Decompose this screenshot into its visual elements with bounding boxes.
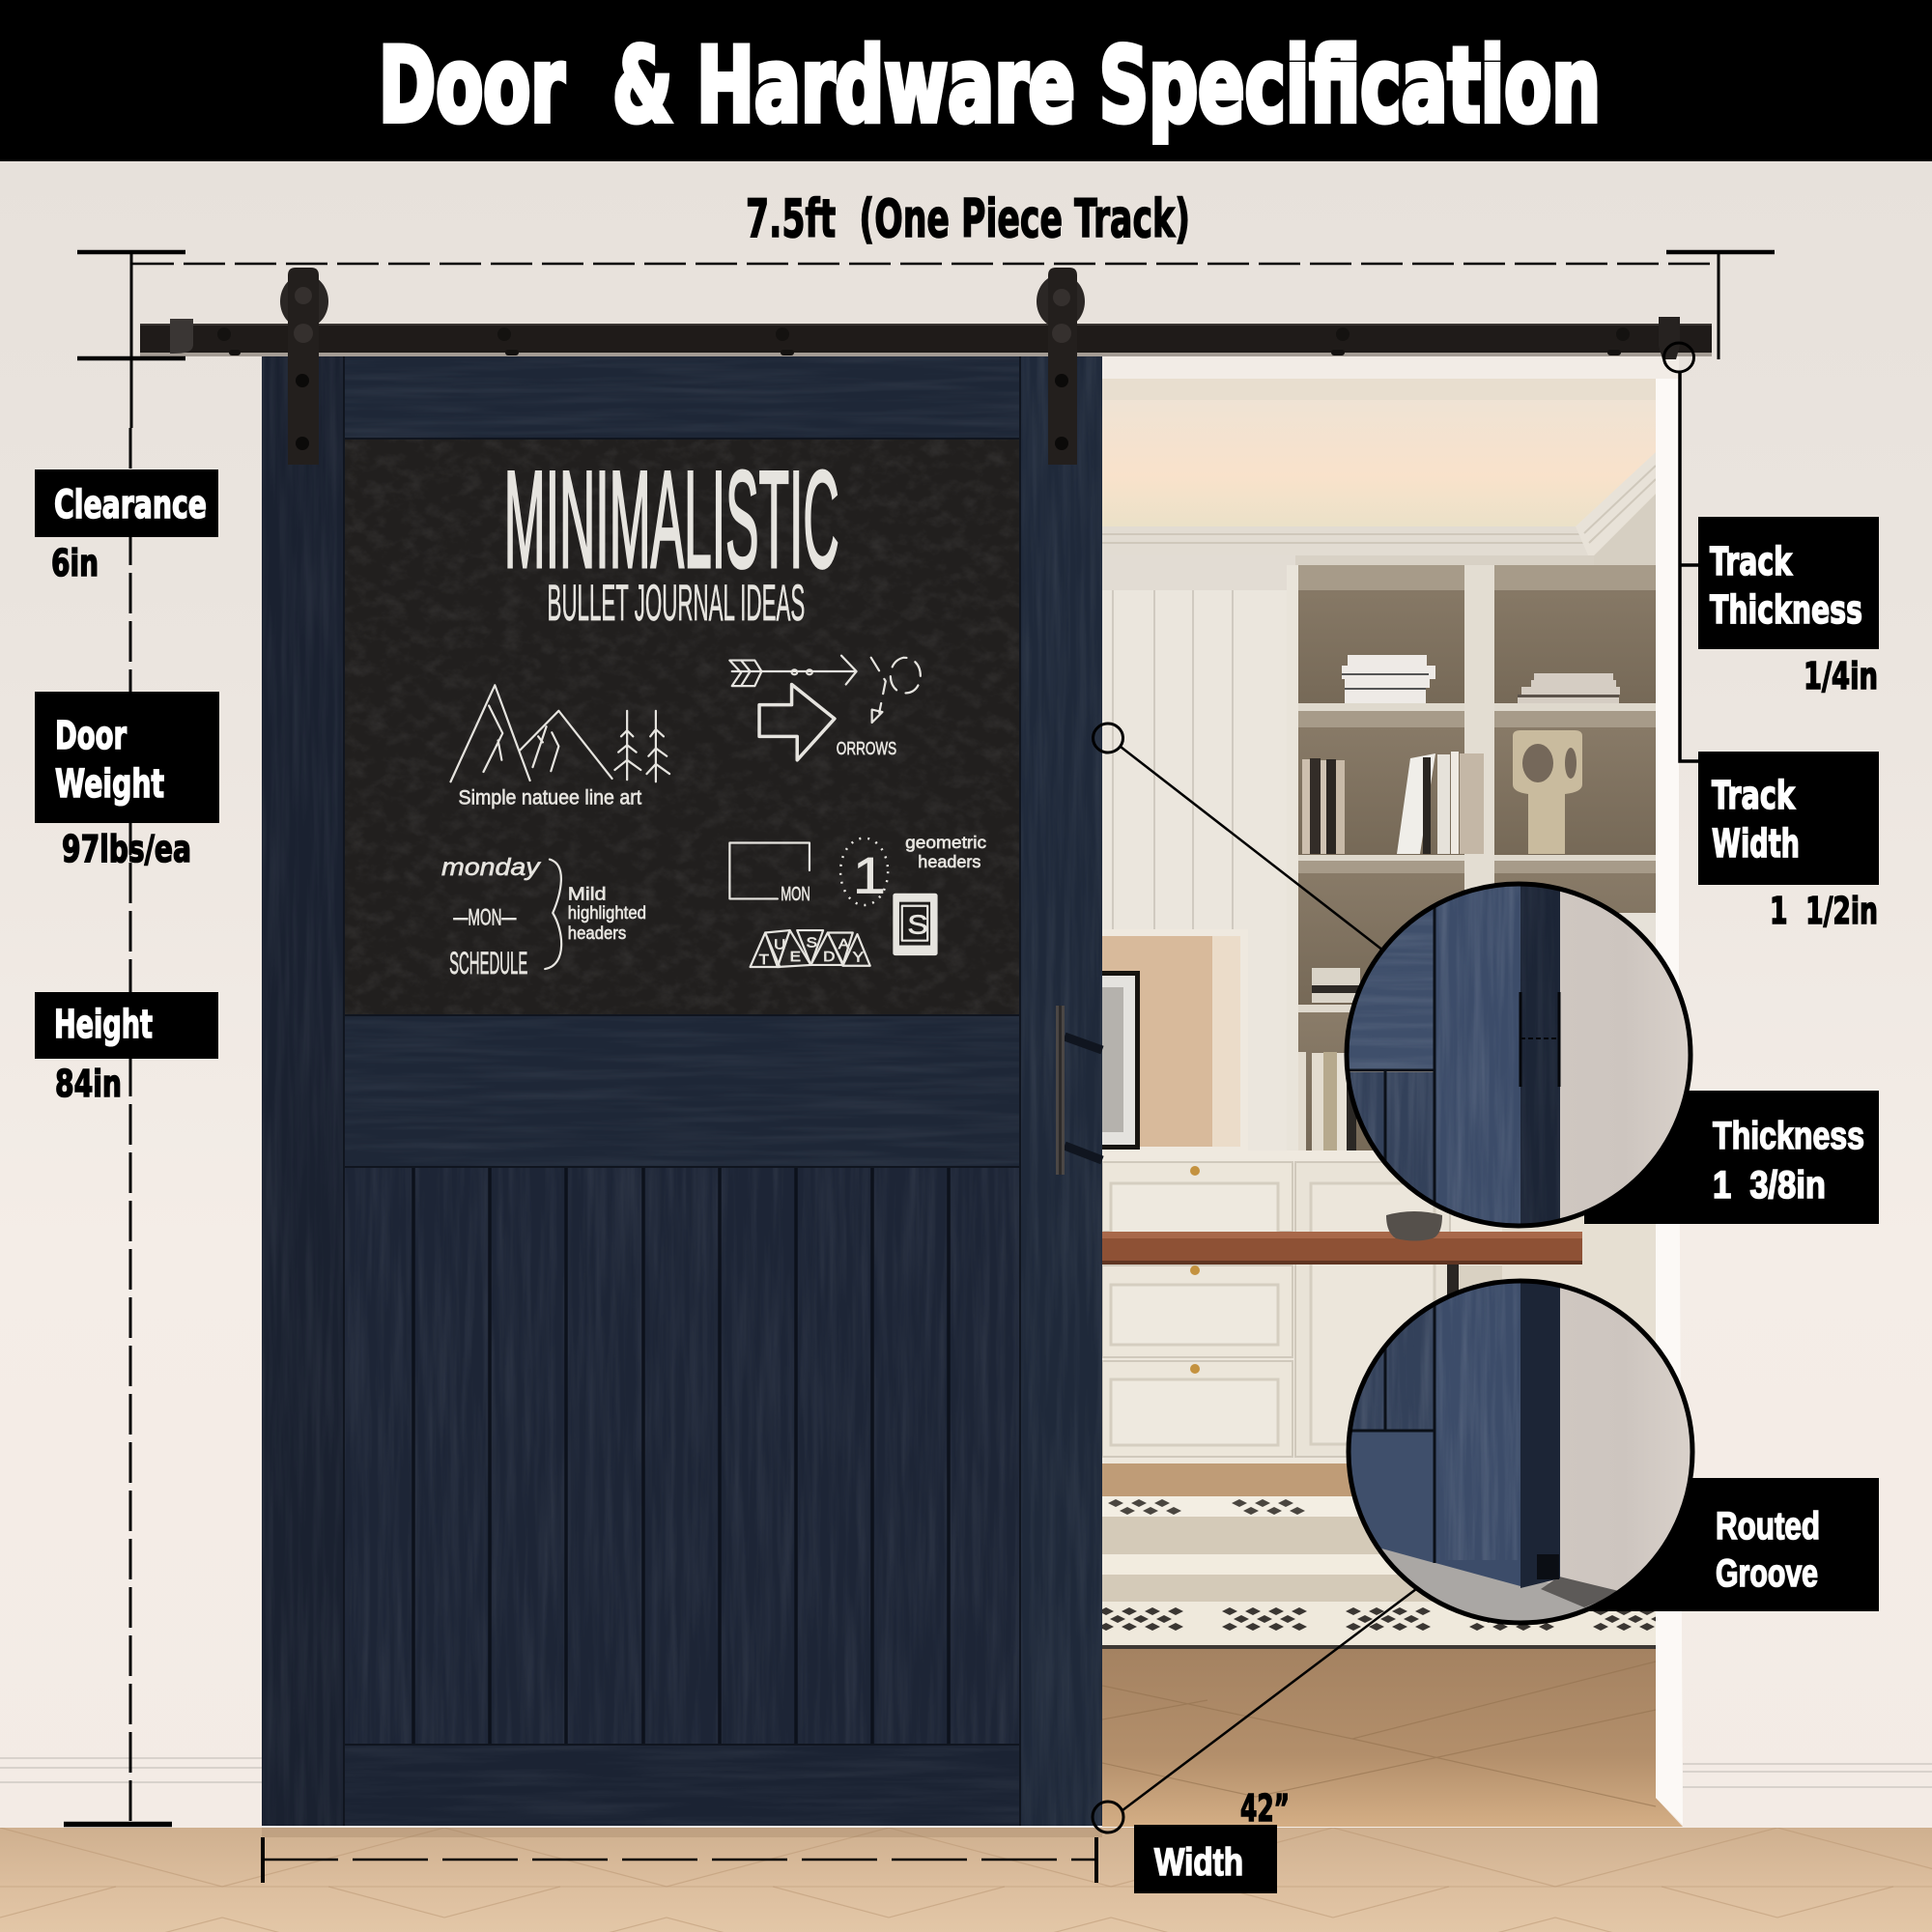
value: width: 42” [1240,1787,1290,1830]
callout: thickness: 1 3/8in [1713,1164,1826,1207]
desk [1102,1211,1582,1264]
value: clearance: 6in [51,542,99,584]
bookshelf [1287,565,1656,1159]
track bolts [217,327,1630,355]
arrows drawing [729,656,921,760]
brace [545,860,561,969]
floor [0,1828,1932,1932]
monday text: monday [441,853,542,880]
leader line groove [1093,1589,1416,1833]
callout: thickness [1584,1091,1879,1224]
callout: routed groove: Routed [1716,1505,1820,1548]
S badge [893,894,938,955]
top rail [345,356,1019,438]
callout: clearance [35,469,218,537]
callout: height [35,992,218,1059]
track length dimension line [77,252,1775,359]
barn door [262,356,1102,1826]
callout: width: Width [1154,1841,1243,1884]
barn door: MINIMALISTIC [504,441,839,596]
chalk caption geometric: headers [918,852,980,871]
right roller hanger [1037,268,1085,465]
callout: track thickness [1698,517,1879,649]
white panelling [1102,555,1295,1159]
callout: track width: Width [1712,822,1800,867]
callout: track thickness: Track [1710,540,1793,584]
room behind door [1102,353,1683,1827]
value: height: 84in [55,1063,122,1105]
lock rail [345,1016,1019,1166]
numbered circle [840,838,888,905]
room floor and rug [1102,1463,1683,1827]
magnifier: door thickness detail [1343,879,1695,1232]
callout: width [1134,1825,1277,1893]
soffit and ceiling [1102,353,1679,526]
framed art [1102,929,1248,1151]
tuesday pennants: U [774,938,785,952]
callout: door weight: Door [55,714,127,758]
callout: routed groove: Groove [1716,1552,1818,1595]
track length label: 7.5ft (One Piece Track) [746,188,1190,249]
mon divider text: —MON— [453,905,517,930]
door width dimension line [263,1837,1096,1883]
chalk caption mild: headers [568,923,626,944]
chalk caption arrows: ORROWS [837,739,896,759]
value: door weight: 97lbs/ea [62,828,191,870]
door slab [262,356,1102,1826]
chalk caption nature: Simple natuee line art [459,785,642,809]
chalkboard panel [345,440,1019,1014]
crown moulding [1102,452,1656,570]
tuesday pennants: T [759,952,769,968]
callout: routed groove [1584,1478,1879,1611]
rectangular header [729,842,810,905]
tuesday pennants: S [807,936,817,951]
track thickness connector [1663,343,1698,761]
callout: track width [1698,752,1879,885]
callout: door weight [35,692,219,823]
tuesday pennants: A [838,937,849,952]
chalk drawings: SCHEDULE [449,946,527,980]
S badge: S [907,910,928,940]
chalk caption geometric: geometric [905,833,986,853]
callout: track width: Track [1712,774,1796,818]
callout: thickness: Thickness [1713,1115,1864,1157]
callout: height: Height [54,1003,153,1047]
tuesday pennants: E [790,950,801,965]
value: track thickness: 1/4in [1804,655,1878,697]
left stile [262,356,343,1826]
right door jamb [1656,379,1683,1825]
mountains and trees [450,685,669,781]
chalk caption geometric [905,833,986,871]
chalk drawings: BULLET JOURNAL IDEAS [548,575,805,632]
rectangular header: MON [781,883,810,905]
left stopper [170,319,193,354]
chalk drawings [441,441,986,980]
magnifier: routed groove detail [1343,1275,1695,1628]
callout: clearance: Clearance [54,483,207,527]
bottom rail [345,1746,1019,1826]
books on shelves [1298,655,1656,1151]
cabinets [1102,1151,1656,1463]
left roller hanger [280,268,328,465]
right stopper [1659,317,1680,359]
numbered circle: 1 [853,848,886,905]
vertical planks [345,1168,1019,1744]
leader line thickness [1094,724,1383,951]
header bar [0,0,1932,161]
tuesday pennants: Y [853,951,865,965]
chalk caption mild: highlighted [568,903,646,923]
callout: door weight: Weight [55,762,164,807]
door handle [1056,1006,1102,1175]
door height dimension line [64,253,172,1824]
chalk caption mild [568,885,646,944]
value: track width: 1 1/2in [1770,890,1878,932]
tuesday pennants: D [823,950,835,965]
callout: track thickness: Thickness [1710,588,1862,633]
baseboard lines [0,1758,1932,1787]
chalk caption mild: Mild [568,885,607,904]
right stile [1021,356,1102,1826]
sliding track [140,317,1712,359]
tuesday pennants [751,930,870,968]
